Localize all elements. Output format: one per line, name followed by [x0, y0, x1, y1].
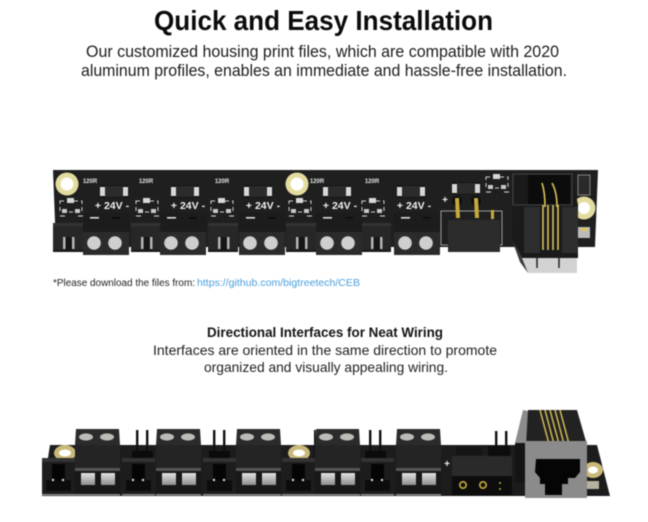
mounting holes [56, 172, 596, 220]
screw terminals [75, 429, 441, 496]
bottom circuit board render [42, 410, 610, 498]
24V silkscreen labels: + 24V - [323, 200, 358, 212]
upright header pins [132, 430, 386, 458]
right edge parts [578, 175, 590, 238]
24V silkscreen labels: + 24V - [95, 200, 130, 212]
120R silkscreen labels: 120R [83, 179, 98, 185]
small corner component [587, 481, 599, 489]
small silkscreen components [60, 174, 509, 216]
120R silkscreen labels [83, 179, 380, 185]
120R silkscreen labels: 120R [365, 179, 380, 185]
JST connectors [53, 223, 391, 252]
section description: organized and visually appealing wiring. [204, 359, 448, 375]
24V silkscreen labels: + 24V - [171, 200, 206, 212]
PCB base [42, 445, 610, 496]
footnote with download link: https://github.com/bigtreetech/CEB [197, 278, 360, 289]
section description [153, 342, 497, 375]
24V silkscreen labels: + 24V - [397, 200, 432, 212]
RJ jack front view [515, 410, 587, 498]
intro text: aluminum profiles, enables an immediate and hassle-free installation. [81, 61, 567, 80]
power connector: + [444, 459, 450, 470]
RJ jack top view [512, 174, 578, 273]
footnote with download link: *Please download the files from: [53, 278, 195, 289]
diodes [100, 182, 480, 198]
power header [441, 195, 502, 252]
120R silkscreen labels: 120R [139, 179, 154, 185]
120R silkscreen labels: 120R [215, 179, 230, 185]
title: Quick and Easy Installation [154, 5, 493, 36]
top circuit board render [53, 170, 598, 273]
power header: + [442, 195, 448, 206]
section heading: Directional Interfaces for Neat Wiring [207, 324, 443, 340]
120R silkscreen labels: 120R [310, 179, 325, 185]
section description: Interfaces are oriented in the same direction to promote [153, 342, 497, 358]
intro text [81, 42, 567, 80]
24V silkscreen labels: + 24V - [246, 200, 281, 212]
power connector [444, 431, 512, 495]
24V silkscreen labels [95, 200, 432, 212]
PCB base [53, 170, 598, 247]
screw terminals [83, 213, 440, 255]
mounting holes [54, 445, 603, 478]
intro text: Our customized housing print files, which are compatible with 2020 [86, 42, 559, 61]
JST connectors [42, 458, 394, 496]
footnote with download link [53, 278, 360, 289]
